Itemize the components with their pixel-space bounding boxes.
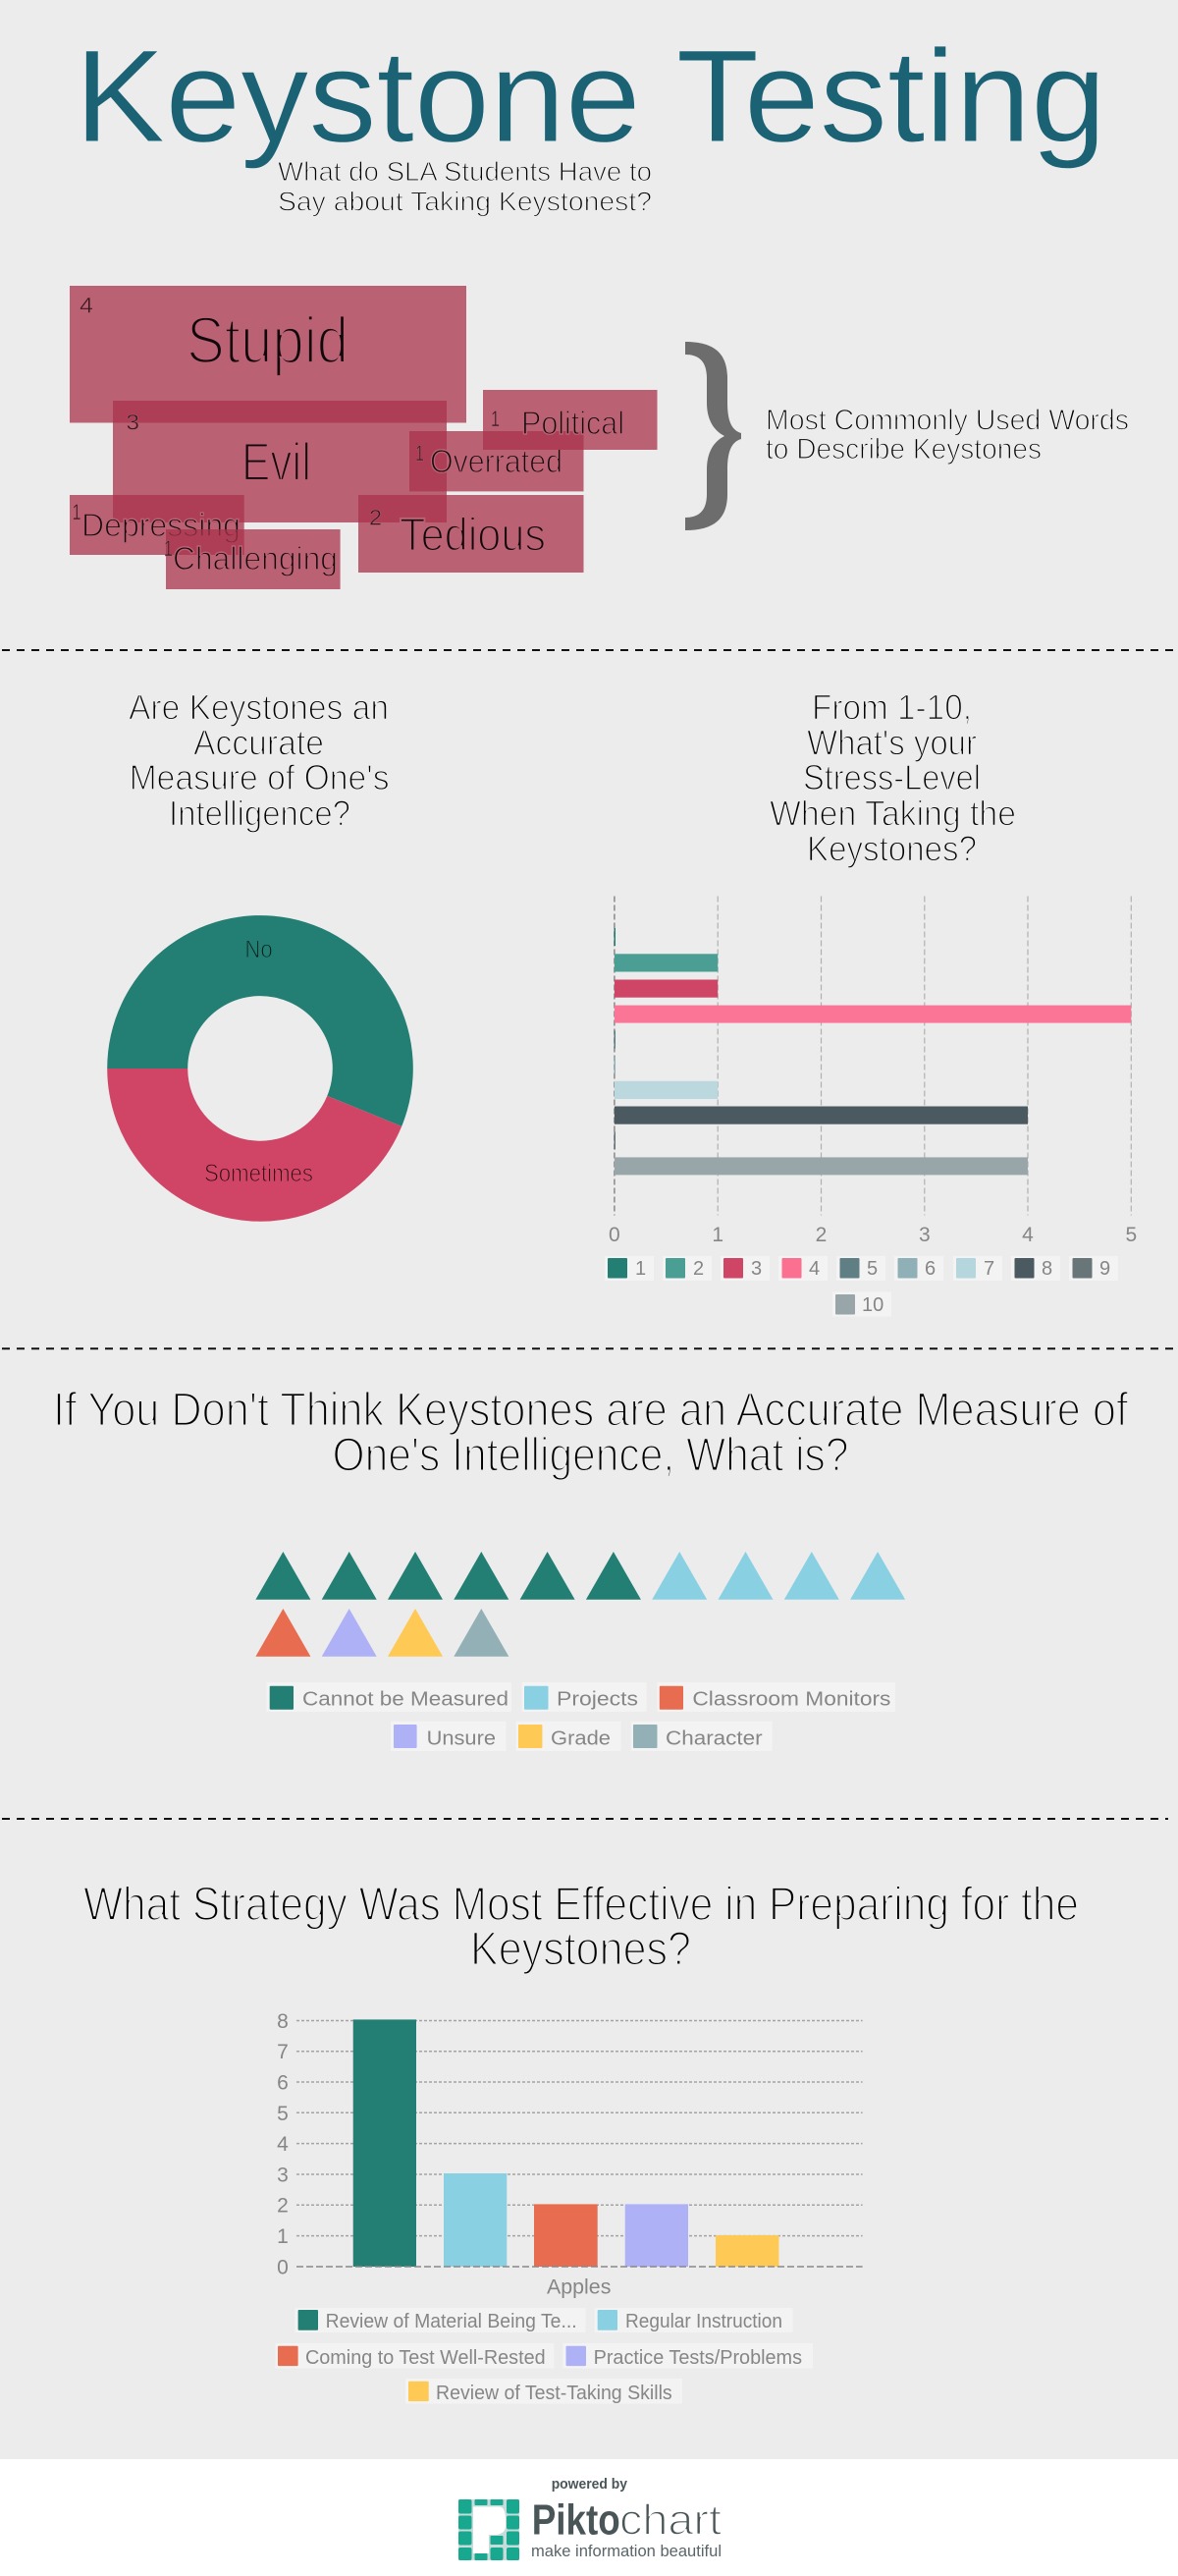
donut chart [107, 915, 413, 1222]
legend: strategies [276, 2308, 813, 2404]
y axis labels: 8 [277, 2010, 289, 2033]
powered by text: powered by [552, 2476, 628, 2493]
subtitle: Say about Taking Keystonest? [278, 187, 652, 216]
footer: powered by Piktochart: chart [619, 2496, 722, 2545]
word box: Political [483, 390, 658, 450]
legend: stress level: 10 [862, 1294, 884, 1316]
tagline: make information beautiful [531, 2542, 722, 2560]
y axis labels: 5 [277, 2103, 289, 2125]
word box: Overrated: Overrated [430, 443, 562, 479]
legend: alternative measures: Cannot be Measured [302, 1689, 509, 1711]
word box: Tedious [358, 495, 583, 573]
heading: effective strategy: What Strategy Was Most Effective in Preparing for the [83, 1879, 1079, 1931]
slice: Sometimes [107, 1069, 402, 1222]
x axis labels: 1 [712, 1224, 723, 1246]
heading: stress level question: What's your [807, 722, 977, 762]
wordmark: Pikto [532, 2496, 620, 2545]
heading: accuracy question: Are Keystones an [129, 687, 389, 727]
legend: strategies: Coming to Test Well-Rested [305, 2347, 546, 2369]
heading: effective strategy: Keystones? [470, 1924, 691, 1976]
heading: stress level question: Keystones? [807, 829, 977, 869]
word box: Evil: 3 [126, 411, 139, 434]
y axis labels: 1 [277, 2225, 289, 2248]
title: Keystone Testing [75, 24, 1106, 170]
legend: alternative measures: Classroom Monitors [692, 1689, 890, 1711]
word box: Depressing: 1 [73, 500, 80, 524]
word box: Overrated: 1 [415, 441, 424, 466]
x axis labels: 0 [609, 1224, 620, 1246]
heading: accuracy question: Measure of One's [130, 757, 390, 797]
y axis labels: 6 [277, 2072, 289, 2094]
word box: Overrated [409, 431, 583, 491]
word box: Stupid: 4 [80, 293, 93, 318]
x axis labels: 3 [919, 1224, 931, 1246]
legend: stress level: 3 [751, 1258, 762, 1280]
pictogram: triangles [255, 1552, 905, 1657]
legend: stress level: 5 [867, 1258, 878, 1280]
heading: accuracy question: Intelligence? [169, 793, 350, 833]
legend: stress level [605, 1256, 1118, 1316]
word box: Political: 1 [491, 407, 500, 431]
legend: alternative measures: Grade [551, 1728, 611, 1750]
subtitle [278, 156, 652, 216]
word box: Depressing: Depressing [81, 507, 241, 543]
word box: Evil: Evil [241, 431, 311, 492]
label: No: No [244, 936, 273, 963]
x axis label: Apples [547, 2276, 611, 2299]
word box: Challenging [164, 529, 341, 589]
column chart: strategies [277, 2010, 863, 2299]
word box: Tedious: Tedious [400, 509, 546, 561]
word box: Evil [113, 401, 447, 522]
heading: accuracy question: Accurate [193, 722, 324, 762]
y axis labels [277, 2010, 289, 2278]
word box: Stupid [70, 286, 466, 422]
footer: powered by Piktochart [0, 2459, 1178, 2576]
y axis labels: 2 [277, 2194, 289, 2218]
legend: alternative measures: Projects [557, 1689, 638, 1711]
horizontal bar chart: stress level [609, 896, 1137, 1246]
legend: strategies: Practice Tests/Problems [594, 2347, 802, 2369]
y axis labels: 7 [277, 2041, 289, 2063]
word box: Tedious: 2 [369, 505, 382, 530]
legend: alternative measures: Unsure [427, 1728, 496, 1750]
icon: curly brace [685, 342, 741, 530]
legend: stress level: 6 [925, 1258, 936, 1280]
legend: stress level: 8 [1042, 1258, 1052, 1280]
icon: Piktochart logo [458, 2499, 519, 2560]
brace caption: Most Commonly Used Words [766, 405, 1129, 436]
word box: Depressing [70, 495, 244, 555]
word box: Stupid: Stupid [187, 304, 348, 377]
slice: No [107, 915, 413, 1126]
legend: stress level: 2 [693, 1258, 704, 1280]
legend: stress level: 9 [1099, 1258, 1110, 1280]
heading: alternative measures [53, 1385, 1129, 1482]
legend: stress level: 4 [809, 1258, 820, 1280]
x axis labels: 4 [1022, 1224, 1034, 1246]
x axis labels [609, 1224, 1137, 1246]
heading: effective strategy [83, 1879, 1079, 1976]
label: Sometimes: Sometimes [204, 1160, 313, 1187]
heading: stress level question [770, 687, 1016, 869]
word box: Challenging: Challenging [173, 540, 338, 576]
y axis labels: 4 [277, 2133, 289, 2156]
word box: Challenging: 1 [164, 536, 173, 561]
panel: most common words [70, 286, 658, 589]
heading: stress level question: From 1-10, [812, 687, 972, 727]
brace caption: to Describe Keystones [766, 433, 1042, 466]
y axis labels: 3 [277, 2165, 289, 2186]
word box: Political: Political [521, 405, 624, 441]
legend: strategies: Regular Instruction [625, 2311, 782, 2332]
legend: stress level: 7 [984, 1258, 994, 1280]
heading: accuracy question [129, 687, 390, 833]
heading: alternative measures: One's Intelligence, What is? [332, 1430, 848, 1482]
subtitle: What do SLA Students Have to [278, 156, 652, 187]
x axis labels: 5 [1125, 1224, 1137, 1246]
brace caption [766, 405, 1129, 466]
heading: stress level question: Stress-Level [803, 757, 981, 797]
legend: alternative measures [267, 1682, 895, 1751]
legend: stress level: 1 [635, 1258, 646, 1280]
x axis labels: 2 [816, 1224, 827, 1246]
legend: alternative measures: Character [666, 1728, 763, 1750]
heading: stress level question: When Taking the [770, 793, 1016, 833]
legend: strategies: Review of Material Being Te... [326, 2311, 577, 2332]
y axis labels: 0 [277, 2257, 289, 2278]
legend: strategies: Review of Test-Taking Skills [436, 2383, 672, 2404]
